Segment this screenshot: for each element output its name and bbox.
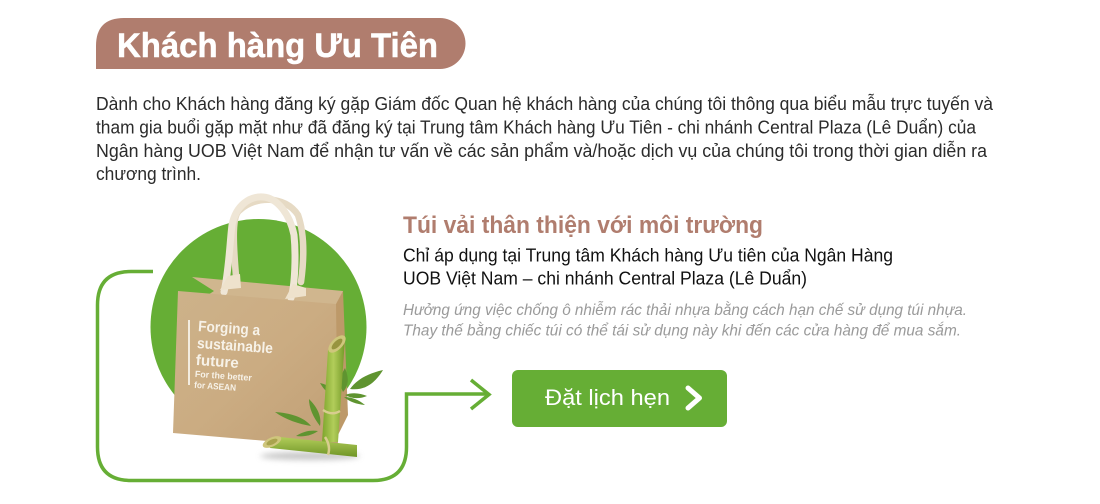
green circle behind bag [150,219,366,435]
bag print text: sustainable [196,335,273,357]
button: Đặt lịch hẹn [512,370,727,427]
bamboo shadow [260,452,360,460]
italic description [403,300,967,340]
heading banner: Khách hàng Ưu Tiên: Khách hàng Ưu Tiên [117,27,438,65]
button: Đặt lịch hẹn: Đặt lịch hẹn [545,385,670,410]
bag front panel [173,291,338,447]
bamboo leaves [275,368,383,436]
intro paragraph: Dành cho Khách hàng đăng ký gặp Giám đốc Quan hệ khách hàng của chúng tôi thông qua biểu mẫu trực tuyến và [96,93,994,114]
bag interior back panel [192,277,343,306]
bag print line [188,320,190,385]
intro paragraph: chương trình. [96,164,201,184]
bag print text: future [195,352,239,372]
illustration: jute tote bag with bamboo [173,197,383,460]
heading banner: Khách hàng Ưu Tiên [96,18,466,69]
bamboo upright stalk [322,338,345,442]
bag print text: for ASEAN [194,380,236,393]
bag print text: For the better [195,369,253,383]
handle tabs [220,274,241,290]
connector arrow to button [98,272,489,480]
intro paragraph: Ngân hàng UOB Việt Nam để nhận tư vấn về các sản phẩm và/hoặc dịch vụ của chúng tôi trong thời gian diễn ra [96,140,988,161]
bag print text [194,318,275,395]
bag print text: Forging a [198,318,261,339]
italic description: Thay thế bằng chiếc túi có thể tái sử dụng này khi đến các cửa hàng để mua sắm. [403,320,961,340]
bamboo horizontal stalk [268,437,357,457]
intro paragraph [96,93,994,184]
eligibility text: UOB Việt Nam – chi nhánh Central Plaza (Lê Duẩn) [403,268,807,288]
eligibility text: Chỉ áp dụng tại Trung tâm Khách hàng Ưu tiên của Ngân Hàng [403,246,893,266]
bag front handle [224,197,295,298]
subheading: Túi vải thân thiện với môi trường: Túi vải thân thiện với môi trường [403,212,763,239]
italic description: Hưởng ứng việc chống ô nhiễm rác thải nhựa bằng cách hạn chế sử dụng túi nhựa. [403,300,967,319]
bag side panel [332,291,348,447]
intro paragraph: tham gia buổi gặp mặt như đã đăng ký tại Trung tâm Khách hàng Ưu Tiên - chi nhánh Central Plaza (Lê Duẩn) của [96,118,977,138]
eligibility text [403,246,893,288]
bag back handle [234,200,303,282]
